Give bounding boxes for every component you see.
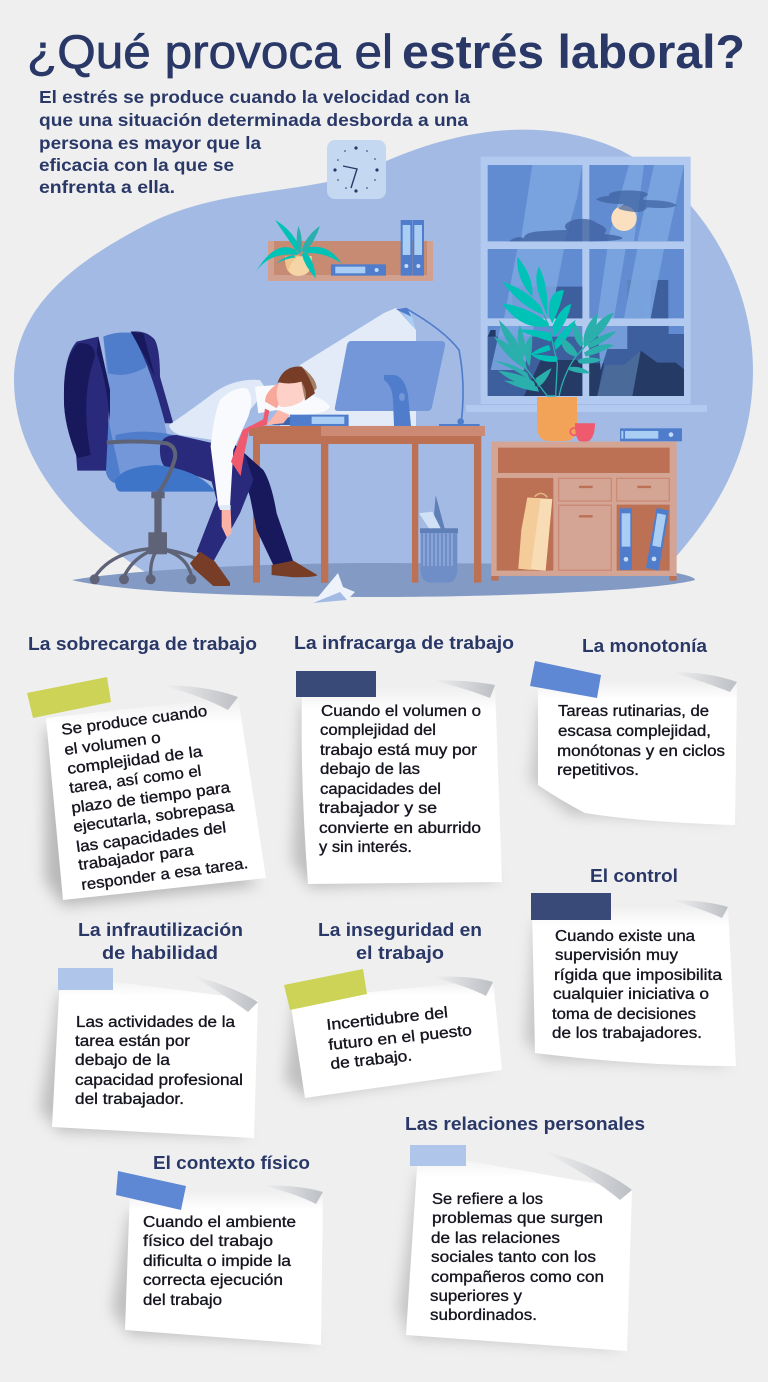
panel: la infracarga de trabajo: trabajo está muy por bbox=[320, 742, 477, 759]
light cone from lamp bbox=[280, 308, 416, 426]
panel: la sobrecarga de trabajo: plazo de tiempo para bbox=[70, 779, 232, 817]
trousers bbox=[160, 435, 293, 565]
hand bbox=[222, 510, 232, 537]
panel: la infracarga de trabajo: debajo de las bbox=[320, 761, 420, 778]
panel: el control: rígida que imposibilita bbox=[554, 967, 722, 984]
shelf plant bbox=[256, 220, 342, 278]
panel: la infrautilización de habilidad: de habilidad bbox=[102, 943, 218, 963]
panel: las relaciones personales: subordinados. bbox=[430, 1307, 537, 1324]
window sill bbox=[466, 405, 707, 412]
panel: la monotonía: repetitivos. bbox=[557, 762, 639, 779]
panel: el contexto físico: dificulta o impide la bbox=[143, 1253, 291, 1270]
panel: el contexto físico: correcta ejecución bbox=[143, 1272, 283, 1289]
panel: las relaciones personales: Las relaciones personales bbox=[405, 1114, 645, 1134]
back shirt bbox=[169, 380, 267, 440]
intro text: que una situación determinada desborda a una bbox=[39, 110, 468, 130]
potted plant bbox=[494, 257, 617, 396]
monitor bbox=[335, 341, 445, 426]
panel: la monotonía: escasa complejidad, bbox=[558, 723, 711, 740]
panel: el control: toma de decisiones bbox=[552, 1006, 696, 1023]
panel: la inseguridad en el trabajo: de trabajo. bbox=[330, 1047, 413, 1073]
title bbox=[27, 25, 745, 78]
panel: la infrautilización de habilidad: del trabajador. bbox=[75, 1091, 184, 1108]
panel: las relaciones personales bbox=[398, 1114, 645, 1351]
right shoe bbox=[272, 561, 317, 577]
panel: la infracarga de trabajo bbox=[292, 633, 514, 888]
cabinet bbox=[491, 442, 677, 581]
floor shadow bbox=[72, 563, 695, 597]
panel: el control: Cuando existe una bbox=[555, 928, 695, 945]
cabinet binder bbox=[620, 428, 682, 441]
shelf binders bbox=[401, 220, 424, 276]
panel: la infrautilización de habilidad bbox=[40, 920, 258, 1138]
panel: la sobrecarga de trabajo: La sobrecarga de trabajo bbox=[28, 634, 257, 654]
panel: la infracarga de trabajo: y sin interés. bbox=[319, 839, 412, 856]
panel: el control: de los trabajadores. bbox=[552, 1025, 702, 1042]
shirt arm bbox=[211, 388, 251, 507]
title: estrés laboral? bbox=[402, 25, 745, 78]
panel: la monotonía: Tareas rutinarias, de bbox=[558, 703, 709, 720]
panel: las relaciones personales: superiores y bbox=[430, 1288, 522, 1305]
panel: las relaciones personales: Se refiere a los bbox=[432, 1191, 543, 1208]
panel: la sobrecarga de trabajo: Se produce cuando bbox=[60, 703, 208, 739]
left shoe bbox=[190, 552, 230, 586]
paper plane bbox=[313, 573, 355, 603]
panel: la infracarga de trabajo: complejidad del bbox=[320, 722, 436, 739]
panel: la infracarga de trabajo: trabajador y se bbox=[319, 800, 437, 817]
waste basket bbox=[419, 495, 458, 583]
intro text: eficacia con la que se bbox=[39, 155, 234, 175]
panel: las relaciones personales: problemas que surgen bbox=[432, 1210, 603, 1227]
panel: el contexto físico: Cuando el ambiente bbox=[143, 1214, 296, 1231]
hand and tie bbox=[231, 409, 290, 476]
desk bbox=[249, 426, 485, 583]
panel: la sobrecarga de trabajo: trabajador para bbox=[77, 842, 195, 874]
panel: el control bbox=[525, 866, 736, 1066]
panel: la inseguridad en el trabajo: La inseguridad en bbox=[318, 920, 482, 940]
panel: la infracarga de trabajo: capacidades del bbox=[320, 781, 441, 798]
panel: las relaciones personales: de las relaciones bbox=[431, 1230, 560, 1247]
intro text: enfrenta a ella. bbox=[39, 177, 175, 197]
hair bbox=[302, 367, 317, 400]
orange pot bbox=[537, 397, 577, 441]
wall clock bbox=[327, 140, 386, 199]
panel: la infracarga de trabajo: La infracarga de trabajo bbox=[294, 633, 514, 653]
panel: la sobrecarga de trabajo: ejecutarla, sobrepasa bbox=[72, 798, 236, 836]
panel: la infrautilización de habilidad: debajo de la bbox=[75, 1052, 170, 1069]
panel: las relaciones personales: sociales tanto con los bbox=[431, 1249, 596, 1266]
panel: la inseguridad en el trabajo: el trabajo bbox=[356, 943, 444, 963]
panel: la sobrecarga de trabajo: responder a esa tarea. bbox=[80, 855, 249, 894]
panel: la sobrecarga de trabajo: las capacidades del bbox=[75, 819, 227, 856]
panel: la inseguridad en el trabajo bbox=[284, 920, 502, 1098]
panel: la infrautilización de habilidad: capacidad profesional bbox=[75, 1072, 243, 1089]
face bbox=[277, 382, 305, 407]
desk lamp bbox=[396, 308, 480, 426]
panel: la infrautilización de habilidad: La infrautilización bbox=[78, 920, 243, 940]
panel: la monotonía bbox=[530, 636, 737, 825]
jacket on chair bbox=[64, 331, 173, 471]
red cup bbox=[570, 423, 595, 442]
panel: el contexto físico: El contexto físico bbox=[153, 1153, 310, 1173]
intro text bbox=[39, 87, 470, 197]
office chair bbox=[90, 332, 220, 584]
panel: el contexto físico bbox=[112, 1153, 323, 1345]
panel: la sobrecarga de trabajo: complejidad de la bbox=[66, 743, 204, 778]
panel: las relaciones personales: compañeros como con bbox=[431, 1269, 604, 1286]
panel: la inseguridad en el trabajo: Incertidubre del bbox=[326, 1004, 449, 1034]
panel: el control: El control bbox=[590, 866, 678, 886]
lying binder on shelf bbox=[331, 264, 386, 276]
chair seat and armrest bbox=[107, 441, 215, 493]
panel: la monotonía: monótonas y en ciclos bbox=[557, 743, 725, 760]
panel: el control: supervisión muy bbox=[555, 947, 678, 964]
sleeping man upper body bbox=[169, 367, 330, 586]
panel: la inseguridad en el trabajo: futuro en el puesto bbox=[328, 1022, 473, 1054]
panel: la sobrecarga de trabajo: tarea, así como el bbox=[68, 763, 202, 797]
panel: la infrautilización de habilidad: Las actividades de la bbox=[76, 1014, 235, 1031]
panel: el contexto físico: del trabajo bbox=[143, 1292, 222, 1309]
intro text: El estrés se produce cuando la velocidad con la bbox=[39, 87, 470, 107]
panel: la infracarga de trabajo: Cuando el volumen o bbox=[321, 703, 481, 720]
intro text: persona es mayor que la bbox=[39, 133, 261, 153]
illustration: tired office worker bbox=[14, 130, 753, 603]
background blob bbox=[14, 130, 753, 575]
binder under head bbox=[272, 415, 349, 426]
panel: el control: cualquier iniciativa o bbox=[553, 986, 709, 1003]
panel: la sobrecarga de trabajo bbox=[27, 634, 266, 906]
wall shelf bbox=[268, 241, 433, 281]
panel: la monotonía: La monotonía bbox=[582, 636, 708, 656]
panel: la sobrecarga de trabajo: el volumen o bbox=[63, 729, 162, 759]
panel: la infracarga de trabajo: convierte en aburrido bbox=[319, 820, 481, 837]
panel: el contexto físico: físico del trabajo bbox=[143, 1233, 273, 1250]
neck bbox=[265, 383, 283, 408]
window bbox=[481, 157, 691, 404]
title: ¿Qué provoca el bbox=[27, 25, 393, 78]
forearm shirt bbox=[255, 385, 330, 417]
panel: la infrautilización de habilidad: tarea están por bbox=[75, 1033, 190, 1050]
